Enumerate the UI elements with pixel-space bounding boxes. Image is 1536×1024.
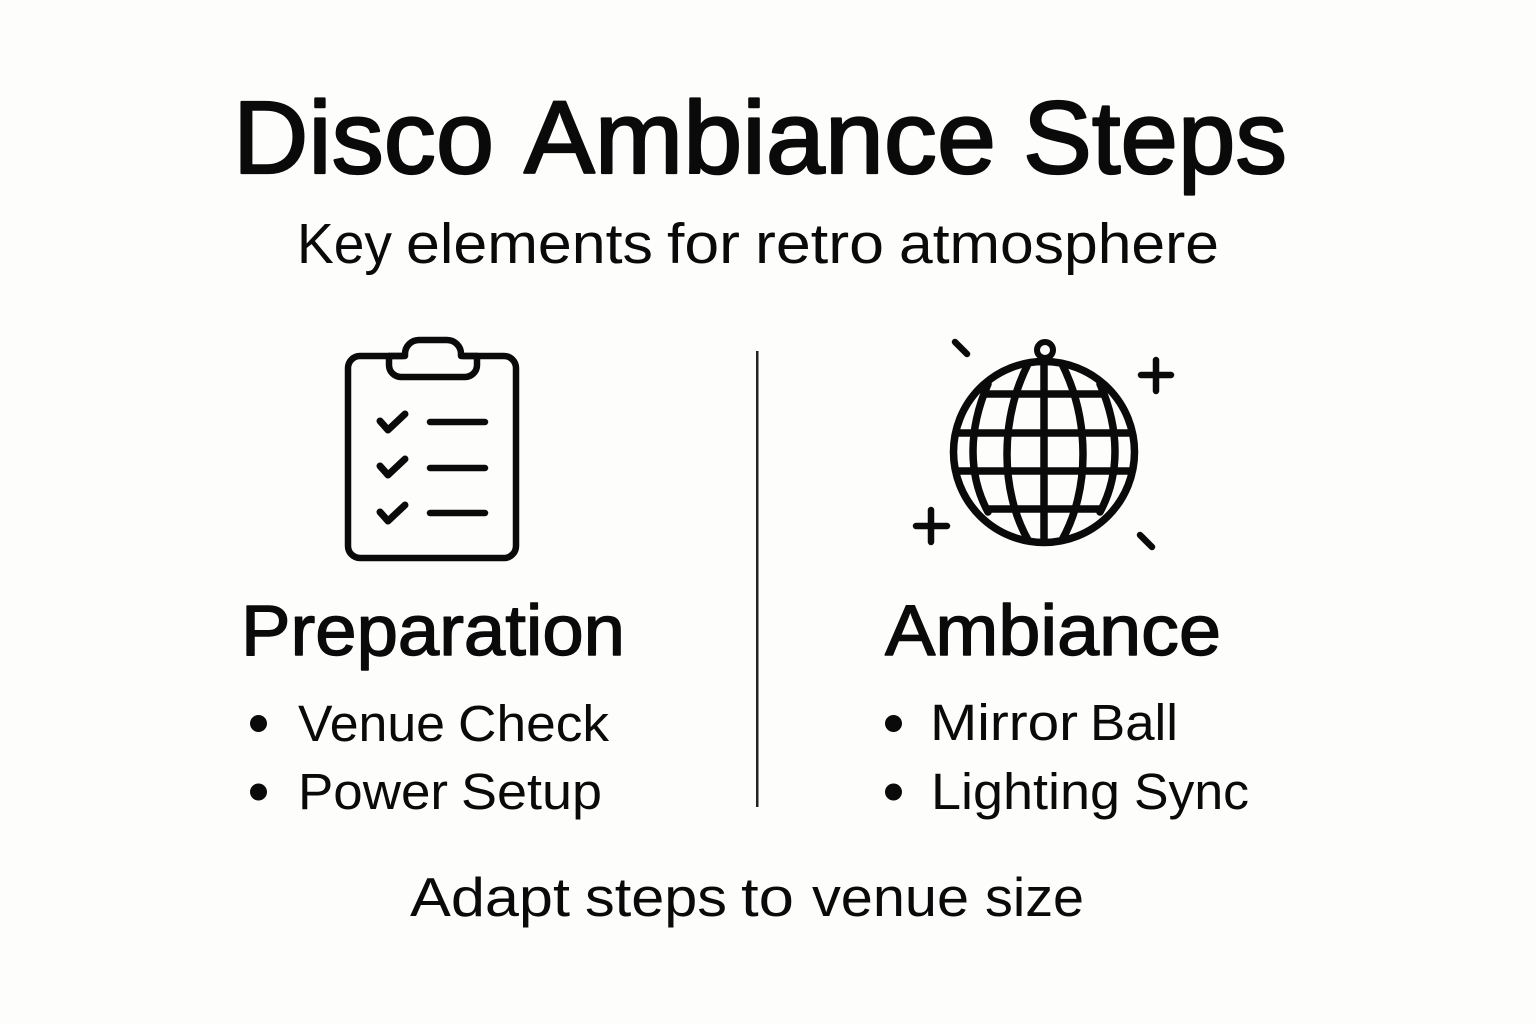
list: ambiance items: Sync [1134, 763, 1249, 820]
title: Disco [233, 80, 494, 195]
subtitle: elements [406, 212, 653, 276]
title [233, 80, 1287, 195]
list: preparation items [250, 695, 610, 820]
footer note: venue [812, 866, 969, 928]
title: Steps [1023, 80, 1287, 195]
footer note: to [741, 866, 794, 928]
footer note: size [985, 866, 1084, 928]
icon: clipboard checklist [348, 340, 516, 558]
panel: ambiance [885, 342, 1249, 820]
list: ambiance items: Mirror [930, 694, 1078, 751]
footer note: Adapt [410, 866, 570, 928]
list: preparation items: Power [298, 763, 448, 820]
subtitle: for [667, 212, 740, 276]
title: Ambiance [524, 80, 996, 195]
list: preparation items: Check [458, 695, 610, 752]
subtitle: retro [755, 212, 884, 276]
subtitle [297, 212, 1219, 276]
footer note [410, 866, 1084, 928]
divider [756, 351, 758, 807]
heading: preparation: Preparation [241, 592, 625, 671]
list: ambiance items: Ball [1090, 694, 1178, 751]
icon: mirror ball [916, 342, 1171, 547]
list: preparation items: Venue [298, 695, 445, 752]
panel: preparation [241, 340, 625, 820]
subtitle: atmosphere [899, 212, 1219, 276]
footer note: steps [585, 866, 727, 928]
list: ambiance items [885, 694, 1249, 820]
heading: ambiance: Ambiance [885, 592, 1221, 671]
list: ambiance items: Lighting [931, 763, 1120, 820]
list: preparation items: Setup [461, 763, 602, 820]
subtitle: Key [297, 212, 392, 276]
